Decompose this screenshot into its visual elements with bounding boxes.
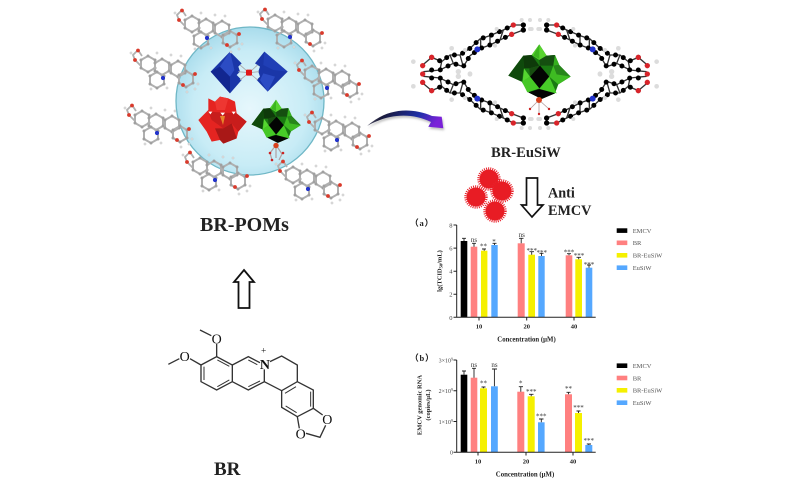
significance b: ns [491, 361, 498, 369]
y axis title a: 50 [438, 263, 444, 268]
y ticks a: 6 [449, 246, 453, 253]
panel: chart b [410, 353, 663, 478]
significance b: *** [526, 388, 537, 396]
axes b [454, 360, 596, 456]
y ticks a: 4 [449, 269, 453, 276]
legend b [617, 363, 663, 407]
y ticks a: 8 [449, 222, 452, 230]
y ticks a [449, 222, 453, 322]
significance a: *** [526, 247, 537, 255]
chemical structure: BR: N [260, 358, 270, 373]
y ticks b: 0 [450, 450, 453, 456]
icon: green polyhedra [252, 100, 301, 143]
x ticks a [476, 324, 577, 330]
legend a: BR-EuSiW [633, 253, 663, 260]
icon: blue polyhedra [211, 52, 288, 93]
chemical structure: BR: + [261, 347, 266, 357]
y ticks a: 2 [449, 292, 452, 299]
panel label a: （a） [410, 218, 434, 228]
x axis title b: Concentration (μM) [496, 472, 554, 478]
significance a: ns [471, 236, 477, 244]
text: Anti EMCV: EMCV [548, 203, 592, 219]
significance a [471, 231, 595, 269]
y ticks b: 2×10 [439, 389, 451, 395]
significance a: ns [519, 231, 525, 239]
x axis title a: Concentration (μM) [497, 336, 556, 344]
legend a: EuSiW [633, 265, 652, 272]
significance b: ** [480, 380, 488, 388]
y axis title b: (copies/μL) [425, 389, 432, 421]
legend a: EMCV [633, 228, 652, 235]
significance a: ** [480, 242, 488, 250]
arrow: hollow up [234, 270, 254, 308]
legend b: EMCV [633, 363, 652, 370]
significance a: *** [536, 249, 547, 257]
icon: europium centre [269, 143, 284, 161]
chemical structure: BR: O [322, 413, 332, 428]
bars a [461, 238, 592, 317]
significance b: *** [536, 412, 547, 420]
significance b: *** [584, 437, 595, 445]
icon: europium with ligands [529, 97, 550, 115]
panel: BR-POMs sphere illustration [124, 8, 373, 204]
legend a: BR [633, 240, 642, 247]
significance b: *** [573, 404, 584, 412]
significance b [471, 361, 595, 445]
legend b: BR-EuSiW [633, 388, 663, 395]
molecules: BR around sphere [124, 8, 373, 204]
y ticks a: 0 [449, 315, 452, 322]
text: Anti EMCV [548, 186, 592, 219]
legend b: EuSiW [633, 400, 652, 407]
y axis title a: lg(TCID [436, 268, 444, 292]
significance a: *** [584, 261, 595, 269]
y ticks b: 3×10 [439, 358, 451, 364]
icon: virus cluster [466, 168, 512, 222]
arrow: hollow down [522, 178, 543, 217]
significance b: * [519, 380, 523, 388]
arrow: curved to BR-EuSiW [367, 111, 443, 128]
x ticks b: 20 [523, 458, 529, 466]
chemical structure: BR: O [212, 332, 222, 347]
significance a: *** [564, 248, 575, 256]
icon: green polyhedra in cage [508, 44, 571, 99]
bars b [461, 368, 592, 452]
chemical structure: BR [168, 330, 332, 442]
x ticks a: 20 [523, 324, 530, 330]
significance b: ns [471, 361, 477, 369]
y axis title b [416, 375, 432, 435]
significance a: * [492, 238, 496, 246]
x ticks b: 40 [570, 458, 576, 466]
axes a [454, 225, 596, 320]
text: Anti EMCV: Anti [548, 186, 575, 202]
y ticks b: 9 [451, 387, 453, 392]
y axis title b: EMCV genomic RNA [416, 375, 424, 435]
panel: BR-EuSiW cage structure [411, 18, 659, 130]
legend a [617, 228, 663, 272]
x ticks a: 10 [476, 324, 482, 330]
panel label b: （b） [410, 353, 435, 363]
legend b: BR [633, 375, 642, 382]
y ticks b: 9 [451, 418, 453, 423]
sphere [176, 27, 324, 175]
x ticks b [475, 458, 576, 466]
x ticks b: 10 [475, 458, 481, 466]
icon: red polyhedra [198, 97, 247, 144]
heading: BR: BR [214, 459, 241, 480]
heading: BR-EuSiW: BR-EuSiW [491, 145, 561, 161]
y ticks b: 1×10 [439, 420, 451, 426]
y ticks b: 9 [451, 356, 453, 362]
y axis title a: /mL) [436, 250, 444, 265]
heading: BR-POMs: BR-POMs [200, 214, 289, 236]
significance b: ** [565, 385, 572, 393]
significance a: *** [574, 252, 585, 260]
chemical structure: BR: O [180, 350, 190, 365]
y ticks b [439, 356, 453, 456]
panel: chart a [410, 218, 663, 344]
x ticks a: 40 [571, 324, 577, 330]
chemical structure: BR: O [296, 427, 306, 442]
